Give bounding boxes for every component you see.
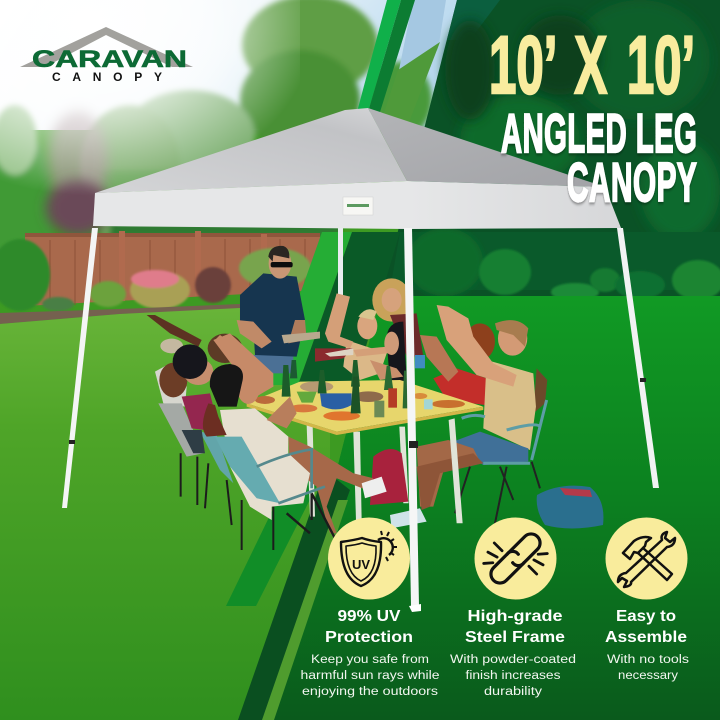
description: finish increases [466,670,561,682]
front woman in white [203,335,387,533]
icon: uv shield [328,518,410,600]
description [450,654,576,698]
description: enjoying the outdoors [302,686,438,698]
description: harmful sun rays while [300,670,440,682]
logo: Caravan Canopy: CARAVAN [32,46,187,73]
icon: uv shield: UV [352,557,370,572]
front teal chair [215,437,335,538]
right chair [462,400,547,463]
back leg [338,226,343,306]
title: angled leg: ANGLED LEG [501,103,697,164]
left lawn [0,300,330,720]
right lawn [273,296,720,720]
right garden darkened [273,0,720,720]
logo: Caravan Canopy: CANOPY [52,70,162,84]
icon: broken chain link [474,518,556,600]
wooden fence [25,231,320,306]
feature: easy to assemble: Assemble [605,629,687,646]
description: With no tools [607,654,689,666]
seated guest dark hair, maroon shirt [173,333,273,453]
right man tan shirt [390,305,547,528]
description: necessary [618,670,678,682]
description: With powder-coated [450,654,576,666]
long-hair woman [370,322,425,383]
feature: steel frame: Steel Frame [465,629,565,646]
man in cream shirt with raised arm [325,293,403,380]
table top [247,380,483,432]
standing man [237,246,320,373]
table legs [307,418,463,523]
feature: uv protection: Protection [325,629,413,646]
description: durability [484,686,542,698]
feature: steel frame [450,518,576,698]
seated guest far left [147,315,202,407]
front-center canopy leg [404,228,421,612]
right leg [617,228,659,488]
green diagonal stripes [226,0,446,720]
description: Keep you safe from [311,654,429,666]
left leg [62,228,98,508]
title: canopy: CANOPY [567,152,697,213]
red-shirt woman [420,323,495,405]
icon: hammer and wrench [606,518,688,600]
blue folded bag [537,486,603,528]
canopy label [343,197,373,215]
soil edge [0,304,240,324]
chairs left [158,403,273,550]
food and dishes [255,348,465,421]
red backpack [370,449,408,505]
back woman curly hair [372,278,423,357]
leg clips [69,378,646,444]
canopy tent [62,108,659,508]
right chair legs [455,462,540,523]
heading: Easy to [616,608,676,625]
title: 10 x 10: 10’ X 10’ [489,20,695,111]
roof [93,108,621,229]
heading: High-grade [468,608,563,625]
feature: uv protection [300,518,440,698]
description [300,654,440,698]
feature: easy to assemble [605,518,689,682]
heading: 99% UV [338,608,401,625]
garden shrubs [0,239,311,311]
logo: Caravan Canopy [20,27,193,84]
description [607,654,689,682]
people at table [147,246,547,550]
